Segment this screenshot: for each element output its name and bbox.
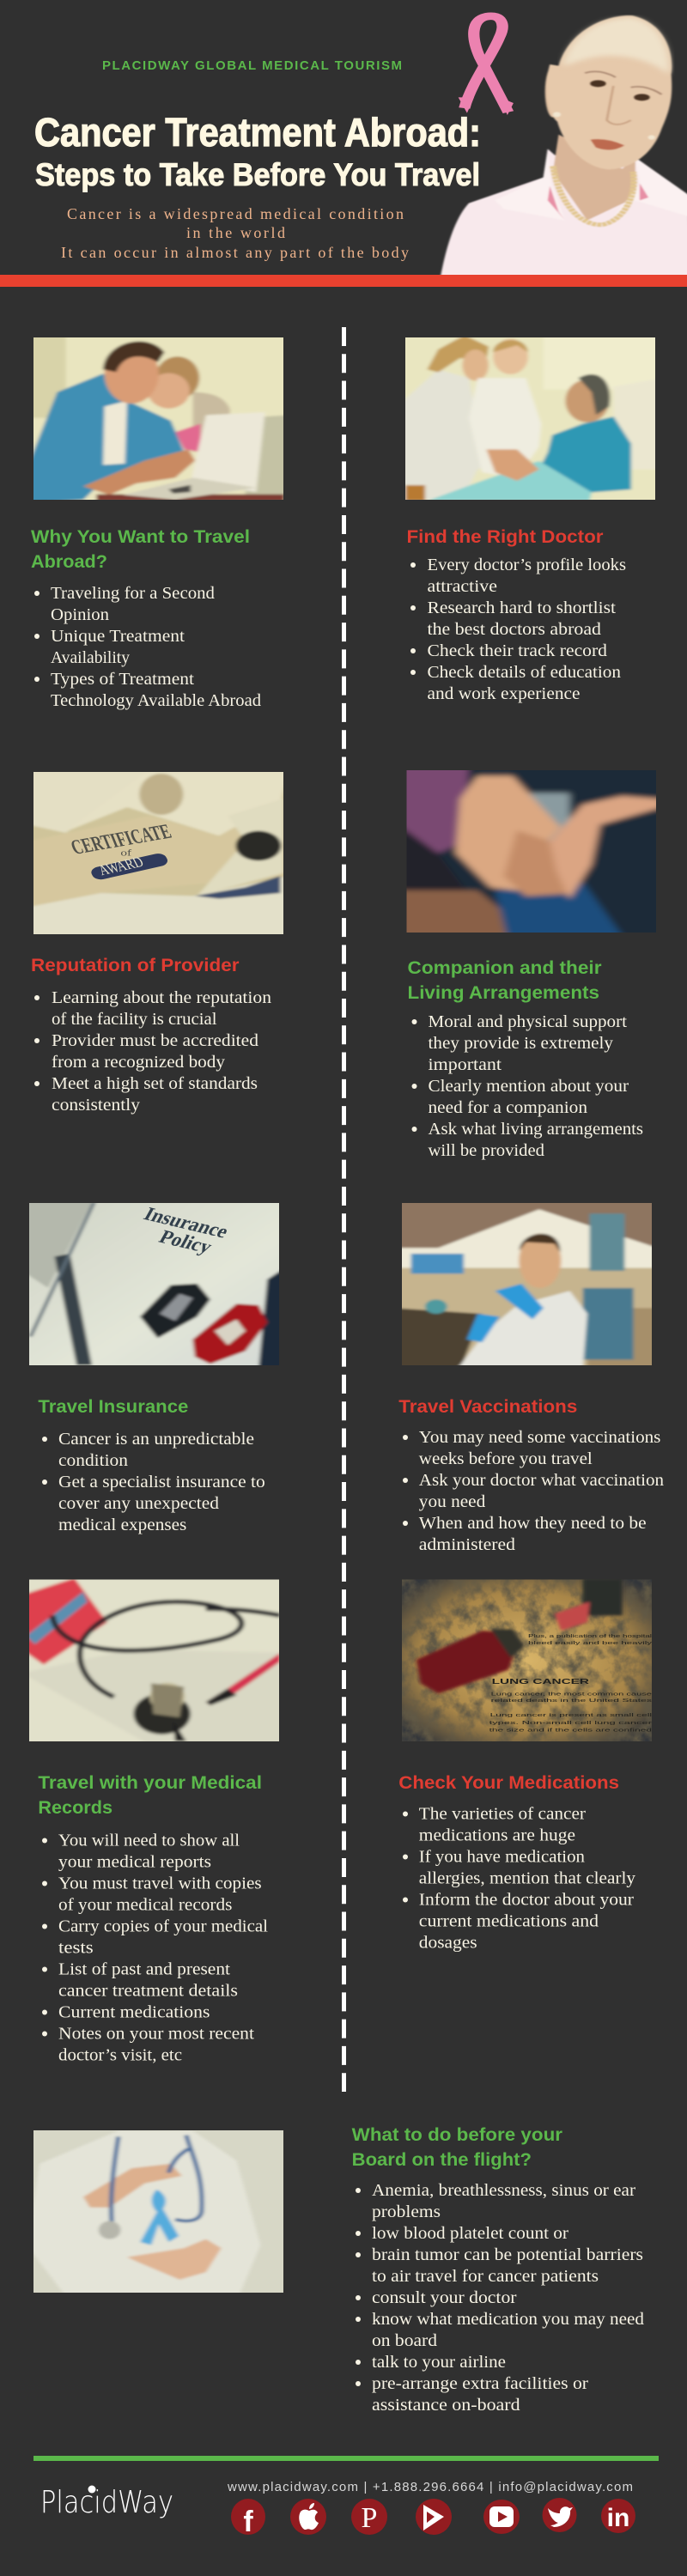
bullet list: Anemia, breathlessness, sinus or ear xyxy=(372,2181,635,2200)
bullet list: Notes on your most recent xyxy=(58,2025,254,2044)
icon: facebook: f xyxy=(243,2506,253,2538)
footer xyxy=(33,2456,659,2538)
icon: apple xyxy=(290,2499,326,2535)
social icons xyxy=(231,2498,635,2538)
bullet list: important xyxy=(428,1055,502,1074)
document wording: Lung cancer, the most common cause xyxy=(491,1692,652,1697)
bullet list: Check their track record xyxy=(428,641,607,660)
bullet list: cancer treatment details xyxy=(58,1982,238,2001)
panel: travel insurance xyxy=(21,1198,285,1534)
bullet list xyxy=(403,1428,664,1554)
bullet list: dosages xyxy=(419,1934,477,1953)
panel: reputation of provider xyxy=(27,767,289,1115)
icon: linkedin: in xyxy=(607,2504,629,2532)
document wording xyxy=(489,1634,653,1733)
document wording: the size and if the cells are confined xyxy=(489,1728,652,1733)
bullet list: Availability xyxy=(51,648,130,667)
dashed vertical divider xyxy=(342,327,346,2092)
document wording: Lung cancer is present as small cell xyxy=(490,1713,653,1718)
panel: check your medications xyxy=(398,1578,653,1953)
bullet list: brain tumor can be potential barriers xyxy=(372,2245,643,2264)
contact line: www.placidway.com | +1.888.296.6664 | info@placidway.com xyxy=(227,2480,633,2494)
bullet list xyxy=(42,1831,268,2064)
photo: holding hands xyxy=(407,770,656,933)
bullet list: current medications and xyxy=(419,1911,599,1930)
bullet list: Research hard to shortlist xyxy=(428,598,616,617)
bullet list: medical expenses xyxy=(58,1516,187,1534)
bullet list: tests xyxy=(58,1939,94,1958)
bullet list: know what medication you may need xyxy=(372,2310,644,2329)
bullet list: You must travel with copies xyxy=(58,1874,262,1893)
bullet list: assistance on-board xyxy=(372,2396,520,2415)
icon: linkedin xyxy=(601,2499,635,2533)
green rule xyxy=(33,2456,659,2461)
bullet list: of your medical records xyxy=(58,1896,233,1915)
photo: doctors greeting patient xyxy=(405,337,655,500)
bullet list xyxy=(412,1012,643,1160)
heading: Travel with your Medical xyxy=(38,1773,262,1793)
bullet list: Ask what living arrangements xyxy=(428,1120,643,1139)
bullet list: will be provided xyxy=(428,1141,544,1160)
bullet list: Clearly mention about your xyxy=(428,1077,629,1096)
bullet list: allergies, mention that clearly xyxy=(419,1868,635,1887)
bullet list: cover any unexpected xyxy=(58,1494,219,1513)
title: Cancer Treatment Abroad: xyxy=(34,110,481,155)
bullet list: Opinion xyxy=(51,605,109,624)
bullet list: Types of Treatment xyxy=(51,670,194,689)
photo: couple at laptop xyxy=(33,337,283,500)
kicker: PlacidWay Global Medical Tourism: PLACIDWAY GLOBAL MEDICAL TOURISM xyxy=(102,58,402,73)
heading: Abroad? xyxy=(31,552,107,572)
bullet list xyxy=(42,1430,265,1534)
bullet list: your medical reports xyxy=(58,1853,211,1872)
red divider bar xyxy=(0,275,687,287)
icon: pinterest: P xyxy=(362,2502,377,2534)
heading xyxy=(352,2125,562,2170)
bullet list: Technology Available Abroad xyxy=(51,691,261,710)
heading: What to do before your xyxy=(352,2125,562,2145)
bullet list: pre-arrange extra facilities or xyxy=(372,2374,588,2393)
intro text: Cancer is a widespread medical condition xyxy=(67,205,404,222)
bullet list: Provider must be accredited xyxy=(52,1031,258,1050)
bullet list: Get a specialist insurance to xyxy=(58,1473,265,1492)
photo: vial on lung cancer text xyxy=(402,1580,653,1741)
document wording: types. Non-small cell lung cancer xyxy=(489,1721,653,1726)
bullet list: talk to your airline xyxy=(372,2353,506,2372)
bullet list: Ask your doctor what vaccination xyxy=(419,1471,664,1490)
bullet list: You may need some vaccinations xyxy=(419,1428,661,1447)
heading: Travel Insurance xyxy=(38,1397,188,1417)
bullet list: Carry copies of your medical xyxy=(58,1917,268,1935)
bullet list xyxy=(403,1805,635,1953)
bullet list: Check details of education xyxy=(428,663,621,682)
bullet list: consult your doctor xyxy=(372,2288,517,2307)
bullet list: condition xyxy=(58,1451,128,1470)
heading: Find the Right Doctor xyxy=(407,527,603,547)
photo: certificates xyxy=(33,772,283,934)
document title: Insurance xyxy=(140,1204,232,1242)
bullet list: medications are huge xyxy=(419,1826,575,1844)
document wording: bleed easily and bee heavily xyxy=(528,1641,653,1646)
icon: twitter xyxy=(543,2498,577,2532)
heading: Records xyxy=(38,1798,112,1818)
bullet list: consistently xyxy=(52,1096,140,1115)
photo: scientist with vaccine xyxy=(402,1203,652,1365)
bullet list: they provide is extremely xyxy=(428,1034,613,1053)
icon: facebook xyxy=(231,2499,265,2538)
bullet list: low blood platelet count or xyxy=(372,2224,568,2243)
heading xyxy=(38,1773,262,1818)
bullet list: The varieties of cancer xyxy=(419,1805,586,1824)
bullet list: weeks before you travel xyxy=(419,1449,593,1468)
icon: play store xyxy=(416,2499,452,2535)
bullet list: List of past and present xyxy=(58,1959,230,1978)
document title: Policy xyxy=(155,1226,216,1258)
bullet list: from a recognized body xyxy=(52,1053,225,1072)
bullet list: Meet a high set of standards xyxy=(52,1074,258,1093)
icon: youtube xyxy=(483,2500,520,2534)
heading xyxy=(31,527,250,572)
bullet list xyxy=(34,584,261,710)
heading: Reputation of Provider xyxy=(31,956,239,975)
logo: PlacidWay: PlacidWay xyxy=(40,2485,173,2520)
photo: certificates: AWARD xyxy=(95,853,147,878)
icon: pinterest xyxy=(351,2499,387,2535)
title xyxy=(34,110,481,192)
heading: Check Your Medications xyxy=(398,1773,619,1793)
panel: why you want to travel abroad xyxy=(27,332,294,710)
photo: stethoscope on medical records xyxy=(29,1580,279,1741)
certificate wording: CERTIFICATE xyxy=(68,821,174,860)
intro text: in the world xyxy=(186,224,285,241)
panel: travel vaccinations xyxy=(394,1198,664,1554)
photo: woman in pink shirt xyxy=(440,15,687,275)
heading: Travel Vaccinations xyxy=(398,1397,577,1417)
bullet list: When and how they need to be xyxy=(419,1514,647,1533)
bullet list: administered xyxy=(419,1535,515,1554)
heading: Living Arrangements xyxy=(407,983,599,1003)
bullet list: need for a companion xyxy=(428,1098,587,1117)
heading: Board on the flight? xyxy=(352,2150,532,2170)
bullet list xyxy=(356,2181,644,2415)
intro text: It can occur in almost any part of the body xyxy=(61,244,409,261)
bullet list: on board xyxy=(372,2331,437,2350)
bullet list: You will need to show all xyxy=(58,1831,240,1850)
panel: before you board the flight xyxy=(27,2124,644,2415)
bullet list: attractive xyxy=(428,577,497,596)
bullet list: to air travel for cancer patients xyxy=(372,2267,599,2286)
document wording: related deaths in the United States xyxy=(491,1698,653,1704)
face features xyxy=(553,71,661,150)
header section xyxy=(0,15,687,287)
intro text xyxy=(61,205,409,261)
bullet list: Inform the doctor about your xyxy=(419,1891,634,1910)
bullet list: If you have medication xyxy=(419,1848,585,1867)
panel: companion and living arrangements xyxy=(394,762,670,1160)
bullet list: Moral and physical support xyxy=(428,1012,627,1031)
panel: travel with your medical records xyxy=(21,1575,285,2064)
bullet list: the best doctors abroad xyxy=(428,620,601,639)
bullet list: Learning about the reputation xyxy=(52,988,271,1007)
photo: insurance policy with toy cars xyxy=(29,1203,279,1365)
bullet list: problems xyxy=(372,2202,441,2221)
bullet list: Current medications xyxy=(58,2002,210,2021)
photo: certificates: of xyxy=(120,848,132,858)
heading: Why You Want to Travel xyxy=(31,527,250,547)
bullet list xyxy=(34,988,271,1115)
bullet list: Every doctor’s profile looks xyxy=(428,556,626,574)
bullet list: Cancer is an unpredictable xyxy=(58,1430,254,1449)
bullet list: doctor’s visit, etc xyxy=(58,2045,182,2064)
icon: pink awareness ribbon xyxy=(459,12,514,115)
bullet list: Traveling for a Second xyxy=(51,584,215,603)
document wording: Plus, a publication of the hospital xyxy=(528,1634,653,1639)
document wording: LUNG CANCER xyxy=(492,1678,590,1686)
bullet list: you need xyxy=(419,1492,485,1511)
bullet list: of the facility is crucial xyxy=(52,1010,217,1029)
title: Steps to Take Before You Travel xyxy=(35,157,480,192)
photo: doctor cupping blue ribbon xyxy=(33,2130,283,2293)
panel: find the right doctor xyxy=(397,332,664,703)
bullet list: and work experience xyxy=(428,684,581,703)
bullet list: Unique Treatment xyxy=(51,627,185,646)
scalp highlight xyxy=(563,18,669,75)
heading: Companion and their xyxy=(407,958,601,978)
heading xyxy=(407,958,601,1003)
bullet list xyxy=(410,556,626,703)
